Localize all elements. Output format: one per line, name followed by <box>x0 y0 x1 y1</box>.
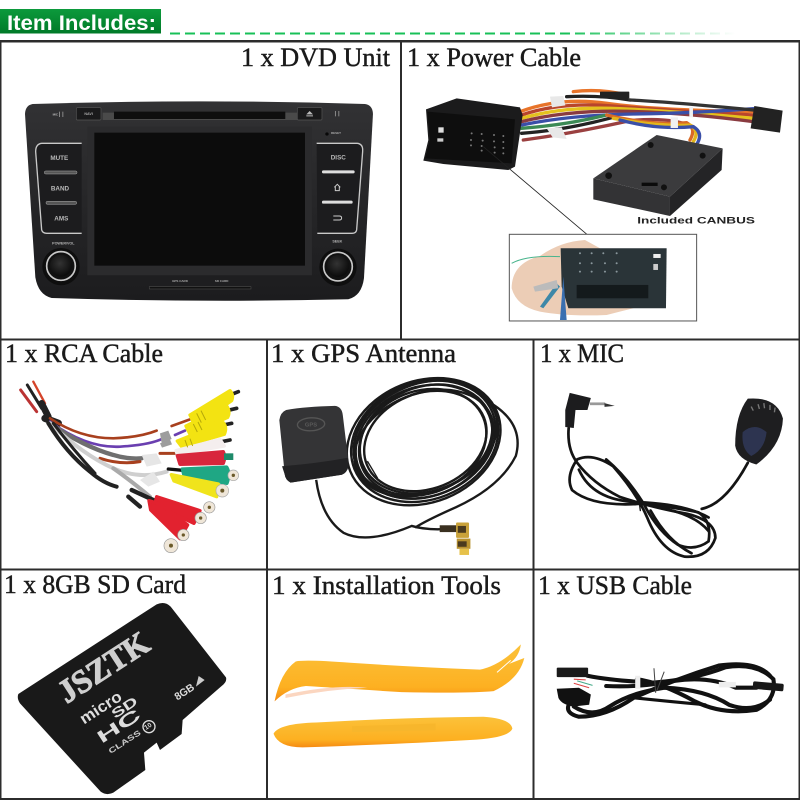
icon: DVD head unit: NAVI <box>84 112 93 116</box>
icon: micro SD card: micro <box>77 688 126 728</box>
header banner <box>0 9 735 35</box>
icon: DVD head unit: MUTE <box>50 155 68 162</box>
icon: micro SD card: 8GB <box>172 681 197 703</box>
icon: micro SD card: CLASS <box>107 728 142 756</box>
icon: DVD head unit: AMS <box>54 216 68 223</box>
inset: connector photo <box>509 234 697 321</box>
title: SD card: 1 x 8GB SD Card <box>4 570 186 599</box>
icon: micro SD card: SD <box>108 693 141 722</box>
icon: DVD head unit: GPS CARD <box>172 279 189 283</box>
title: installation tools: 1 x Installation Tools <box>272 571 501 600</box>
icon: microphone <box>565 393 783 557</box>
icon: GPS antenna <box>279 356 520 555</box>
icon: micro SD card: HC <box>93 704 145 747</box>
title: USB cable: 1 x USB Cable <box>538 571 692 600</box>
icon: USB cable <box>557 664 784 717</box>
icon: micro SD card: JSZTK <box>51 625 157 711</box>
icon: DVD head unit: POWER/VOL <box>52 241 75 245</box>
icon: micro SD card: 10 <box>143 722 154 732</box>
title: RCA cable: 1 x RCA Cable <box>5 339 163 368</box>
icon: DVD head unit: SEEK <box>332 239 343 243</box>
icon: DVD head unit: BAND <box>51 185 70 192</box>
icon: pry tools <box>274 644 524 747</box>
icon: RCA cable bundle <box>21 382 239 553</box>
panel: MIC <box>534 339 800 569</box>
heading: Item Includes: Item Includes: <box>7 11 156 35</box>
icon: power cable harness <box>423 91 783 321</box>
panel: GPS antenna <box>267 339 533 569</box>
title: MIC: 1 x MIC <box>540 339 624 368</box>
panel: DVD unit <box>0 41 401 339</box>
panel: installation tools <box>267 570 533 800</box>
title: GPS antenna: 1 x GPS Antenna <box>271 339 456 368</box>
panel: power cable <box>401 41 800 339</box>
icon: micro SD card <box>18 603 226 794</box>
panel: USB cable <box>534 570 800 800</box>
icon: DVD head unit: SD CARD <box>215 279 229 283</box>
icon: DVD head unit: RESET <box>331 131 341 135</box>
icon: DVD head unit: MIC <box>53 113 59 117</box>
icon: DVD head unit <box>25 101 373 301</box>
panel: SD card <box>0 570 266 800</box>
title: DVD unit: 1 x DVD Unit <box>241 43 391 72</box>
panel: RCA cable <box>0 339 266 569</box>
icon: GPS antenna: GPS <box>305 423 317 429</box>
title: power cable: 1 x Power Cable <box>407 43 581 72</box>
label: included CANBUS: Included CANBUS <box>637 215 755 225</box>
icon: DVD head unit: DISC <box>331 154 346 161</box>
